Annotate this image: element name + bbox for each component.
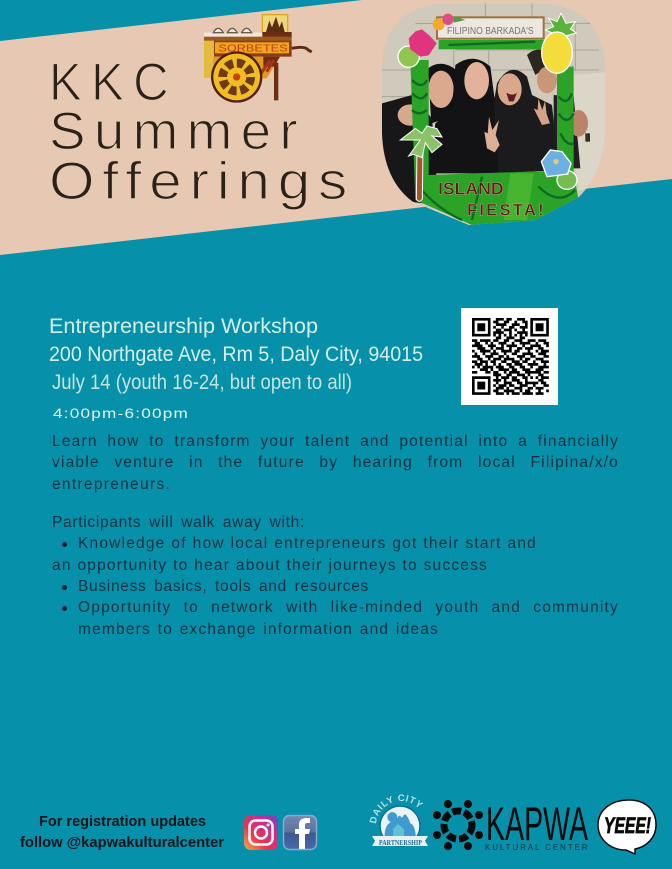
person: man right — [574, 72, 605, 190]
icon: facebook — [284, 816, 316, 850]
pineapple — [545, 13, 576, 36]
photo: group in island fiesta frame: FILIPINO BARKADA'S — [447, 26, 534, 37]
title: KKC — [49, 53, 178, 112]
participants list: Knowledge of how local entrepreneurs got their start and — [78, 535, 537, 552]
participants list: an opportunity to hear about their journeys to success — [52, 557, 488, 574]
tropical frame — [410, 60, 579, 225]
registration text: For registration updates — [39, 813, 206, 830]
description paragraph: viable venture in the future by hearing from local Filipina/x/o — [52, 454, 619, 471]
participants list: Participants will walk away with: — [52, 514, 305, 531]
bullet three — [62, 606, 67, 611]
participants list: Opportunity to network with like-minded youth and community — [78, 599, 619, 616]
palm tree — [416, 147, 423, 201]
beige diagonal band — [0, 0, 672, 255]
photo wall — [382, 3, 605, 225]
logo: Kapwa Kultural Center — [433, 797, 589, 852]
blue flower — [557, 171, 577, 189]
description paragraph: entrepreneurs. — [52, 476, 171, 493]
participants list: members to exchange information and ideas — [78, 621, 439, 638]
person: woman one — [382, 95, 439, 205]
event heading lines: 200 Northgate Ave, Rm 5, Daly City, 94015 — [49, 343, 423, 366]
person: woman two — [429, 59, 499, 173]
participants list — [52, 514, 619, 638]
registration text — [20, 813, 224, 851]
bullet two — [62, 585, 67, 590]
title: Offerings — [49, 152, 355, 211]
logo: Kapwa Kultural Center: KULTURAL CENTER — [485, 843, 589, 852]
description paragraph — [52, 433, 619, 493]
sign: Filipino Barkada's — [437, 17, 544, 39]
participants list: Business basics, tools and resources — [78, 578, 369, 595]
hands — [484, 117, 500, 152]
person: woman three — [494, 70, 559, 173]
description paragraph: Learn how to transform your talent and potential into a financially — [52, 433, 619, 450]
bullet one — [62, 542, 67, 547]
event heading lines: Entrepreneurship Workshop — [49, 315, 318, 338]
QR code — [461, 308, 558, 405]
event heading lines: July 14 (youth 16-24, but open to all) — [52, 371, 352, 394]
registration text: follow @kapwakulturalcenter — [20, 834, 224, 851]
logo: Daily City Partnership — [370, 794, 428, 847]
logo: Daily City Partnership: PARTNERSHIP — [379, 839, 423, 847]
icon: sorbetes cart: SORBETES — [218, 43, 288, 54]
frame lettering: ISLAND — [438, 178, 504, 198]
photo: group in island fiesta frame: FIESTA! — [467, 200, 544, 219]
icon: instagram — [244, 815, 278, 850]
event heading lines — [49, 315, 423, 421]
logo: Daily City Partnership: DAILY CITY — [370, 794, 424, 824]
logo: YEEE speech bubble: YEEE! — [604, 813, 651, 838]
title — [49, 53, 355, 211]
event heading lines: 4:00pm-6:00pm — [53, 405, 189, 421]
photo: group in island fiesta frame — [382, 3, 605, 225]
icon: sorbetes cart — [204, 15, 312, 103]
pink flower and leaves — [398, 46, 419, 67]
logo: Kapwa Kultural Center: KAPWA — [486, 797, 588, 850]
title: Summer — [49, 102, 306, 161]
logo: YEEE speech bubble — [598, 800, 656, 854]
